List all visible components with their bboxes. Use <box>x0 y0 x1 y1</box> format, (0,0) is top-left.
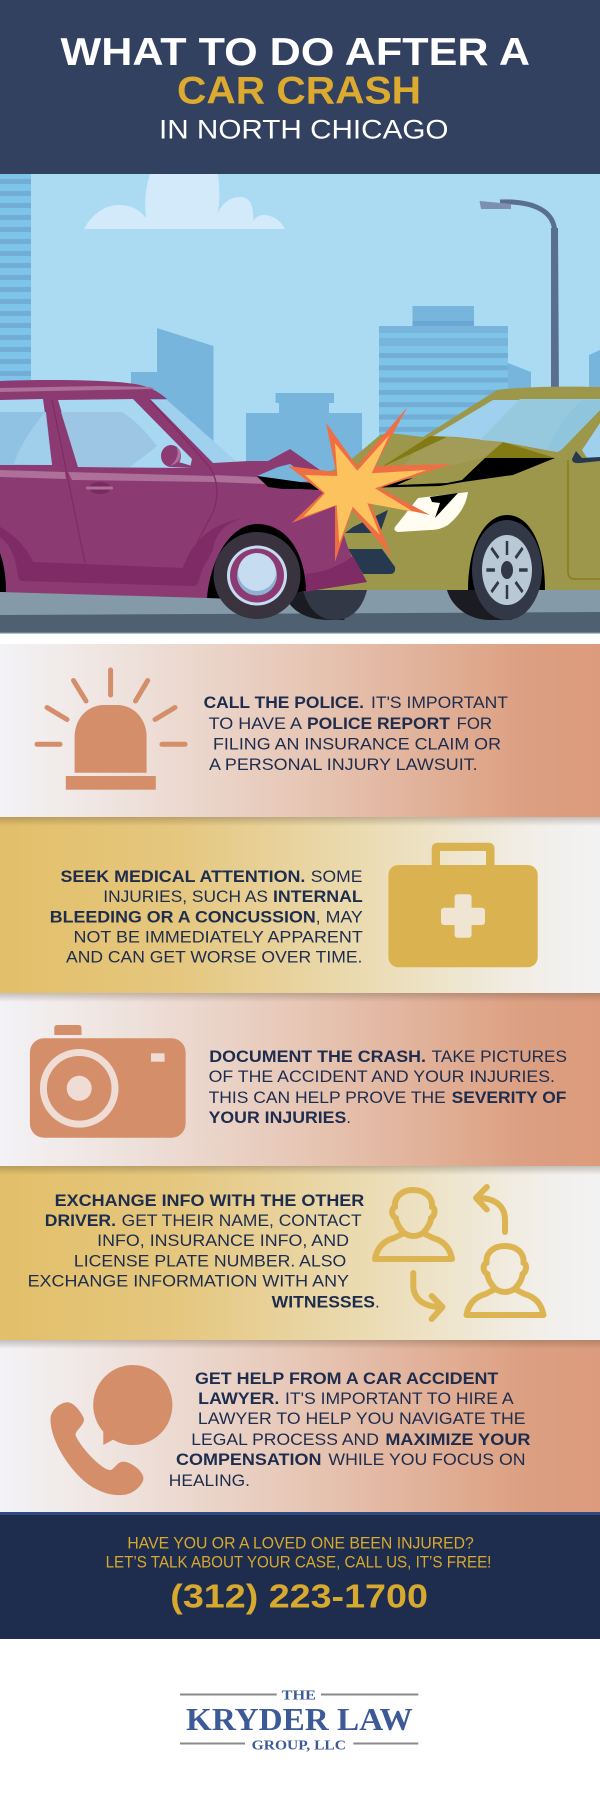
footer call to action <box>0 1512 600 1639</box>
illustration: car crash scene <box>0 174 600 634</box>
headlight <box>394 492 468 532</box>
text: exchange info: INFO, INSURANCE INFO, AND <box>97 1231 349 1250</box>
street lamp <box>480 201 559 400</box>
text: get help from a lawyer: HEALING. <box>169 1471 250 1490</box>
text: get help from a lawyer: WHILE YOU FOCUS ON <box>328 1450 526 1469</box>
windshield <box>433 400 600 452</box>
text: exchange info: GET THEIR NAME, CONTACT <box>122 1211 362 1230</box>
text: exchange info: EXCHANGE INFO WITH THE OTHER <box>55 1191 364 1210</box>
grille <box>345 510 388 533</box>
call to action text: LET’S TALK ABOUT YOUR CASE, CALL US, IT’S FREE! <box>106 1554 491 1572</box>
text: document the crash: THIS CAN HELP PROVE THE <box>209 1088 446 1107</box>
text: call the police <box>204 693 508 774</box>
text: seek medical attention: SEEK MEDICAL ATTENTION. <box>60 867 305 886</box>
panel: call the police <box>0 644 600 817</box>
text: call the police: FILING AN INSURANCE CLAIM OR <box>213 734 501 753</box>
lower bumper shade <box>303 556 367 592</box>
side window and mirror <box>582 423 600 458</box>
text: call the police: CALL THE POLICE. <box>204 693 364 712</box>
logo: the kryder law group: KRYDER LAW <box>186 1701 413 1737</box>
text: exchange info <box>28 1191 380 1312</box>
call to action text: HAVE YOU OR A LOVED ONE BEEN INJURED? <box>127 1535 474 1553</box>
call to action text <box>106 1535 491 1572</box>
olive car <box>300 387 600 620</box>
logo: the kryder law group <box>180 1688 418 1753</box>
side mirror <box>161 445 192 468</box>
text: seek medical attention: AND CAN GET WORSE OVER TIME. <box>66 948 362 967</box>
icon: camera <box>30 1025 186 1138</box>
text: get help from a lawyer: LEGAL PROCESS AND <box>191 1430 379 1449</box>
text: document the crash: OF THE ACCIDENT AND YOUR INJURIES. <box>209 1067 555 1086</box>
text: exchange info: DRIVER. <box>45 1211 116 1230</box>
door handle <box>86 482 113 494</box>
roof highlight <box>0 386 155 392</box>
text: document the crash: DOCUMENT THE CRASH. <box>209 1047 426 1066</box>
panel: get help from a lawyer <box>0 1340 600 1512</box>
front wheel arch <box>207 524 306 600</box>
subtitle: in north chicago: IN NORTH CHICAGO <box>159 114 448 144</box>
icon: two people exchanging info <box>375 1187 544 1319</box>
title line: what to do after a: WHAT TO DO AFTER A <box>60 31 530 74</box>
text: get help from a lawyer: LAWYER TO HELP YOU NAVIGATE THE <box>198 1409 526 1428</box>
logo: the kryder law group: THE <box>282 1688 316 1703</box>
icon: medical kit <box>388 843 538 967</box>
text: seek medical attention: NOT BE IMMEDIATELY APPARENT <box>74 928 363 947</box>
hidden far wheels <box>283 590 512 620</box>
text: exchange info: EXCHANGE INFORMATION WITH ANY <box>28 1272 349 1291</box>
text: document the crash: . <box>346 1108 351 1127</box>
text: call the police: FOR <box>457 714 492 733</box>
text: document the crash: SEVERITY OF <box>452 1088 566 1107</box>
header panel <box>0 0 600 174</box>
text: call the police: IT'S IMPORTANT <box>371 693 508 712</box>
windows <box>0 399 192 468</box>
logo: the kryder law group: GROUP, LLC <box>252 1738 346 1753</box>
door lines <box>52 400 217 563</box>
hood folds <box>380 436 447 468</box>
title line: car crash: CAR CRASH <box>177 70 421 112</box>
panel: seek medical attention <box>0 817 600 993</box>
door line <box>568 460 600 579</box>
skyline buildings <box>0 174 600 500</box>
wheel arch <box>468 515 545 590</box>
purple car wheel <box>214 532 300 619</box>
text: exchange info: LICENSE PLATE NUMBER. ALSO <box>74 1252 346 1271</box>
text: seek medical attention: INTERNAL <box>273 887 363 906</box>
text: seek medical attention <box>50 867 363 967</box>
front wheel <box>472 520 542 620</box>
text: seek medical attention: , MAY <box>316 907 363 926</box>
text: seek medical attention: BLEEDING OR A CONCUSSION <box>50 907 316 926</box>
fender crack <box>257 476 325 490</box>
text: call the police: POLICE REPORT <box>307 714 451 733</box>
text: seek medical attention: INJURIES, SUCH AS <box>103 887 268 906</box>
lower sill shading <box>0 517 252 586</box>
text: get help from a lawyer: GET HELP FROM A CAR ACCIDENT <box>195 1369 499 1388</box>
road <box>0 590 600 634</box>
text: exchange info: . <box>375 1293 380 1312</box>
text: seek medical attention: SOME <box>311 867 362 886</box>
text: exchange info: WITNESSES <box>272 1293 375 1312</box>
text: get help from a lawyer: IT'S IMPORTANT TO HIRE A <box>285 1389 514 1408</box>
phone number: (312) 223-1700 <box>170 1578 428 1615</box>
purple car <box>0 380 367 619</box>
text: call the police: A PERSONAL INJURY LAWSUIT. <box>209 755 478 774</box>
text: get help from a lawyer: COMPENSATION <box>176 1450 322 1469</box>
text: get help from a lawyer: LAWYER. <box>198 1389 279 1408</box>
text: get help from a lawyer <box>169 1369 530 1490</box>
trim stripes <box>0 470 265 484</box>
panel: exchange info <box>0 1166 600 1340</box>
text: get help from a lawyer: MAXIMIZE YOUR <box>385 1430 530 1449</box>
rear wheel arch <box>0 553 6 592</box>
text: document the crash: YOUR INJURIES <box>209 1108 346 1127</box>
text: document the crash <box>209 1047 567 1127</box>
icon: phone with speech bubble <box>50 1365 172 1495</box>
text: document the crash: TAKE PICTURES <box>432 1047 567 1066</box>
impact starburst <box>288 407 452 562</box>
panel: document the crash <box>0 993 600 1166</box>
hood crack <box>360 458 555 488</box>
text: call the police: TO HAVE A <box>209 714 303 733</box>
icon: siren <box>37 670 185 790</box>
sky gap under hood <box>257 464 320 482</box>
cloud <box>84 174 285 229</box>
